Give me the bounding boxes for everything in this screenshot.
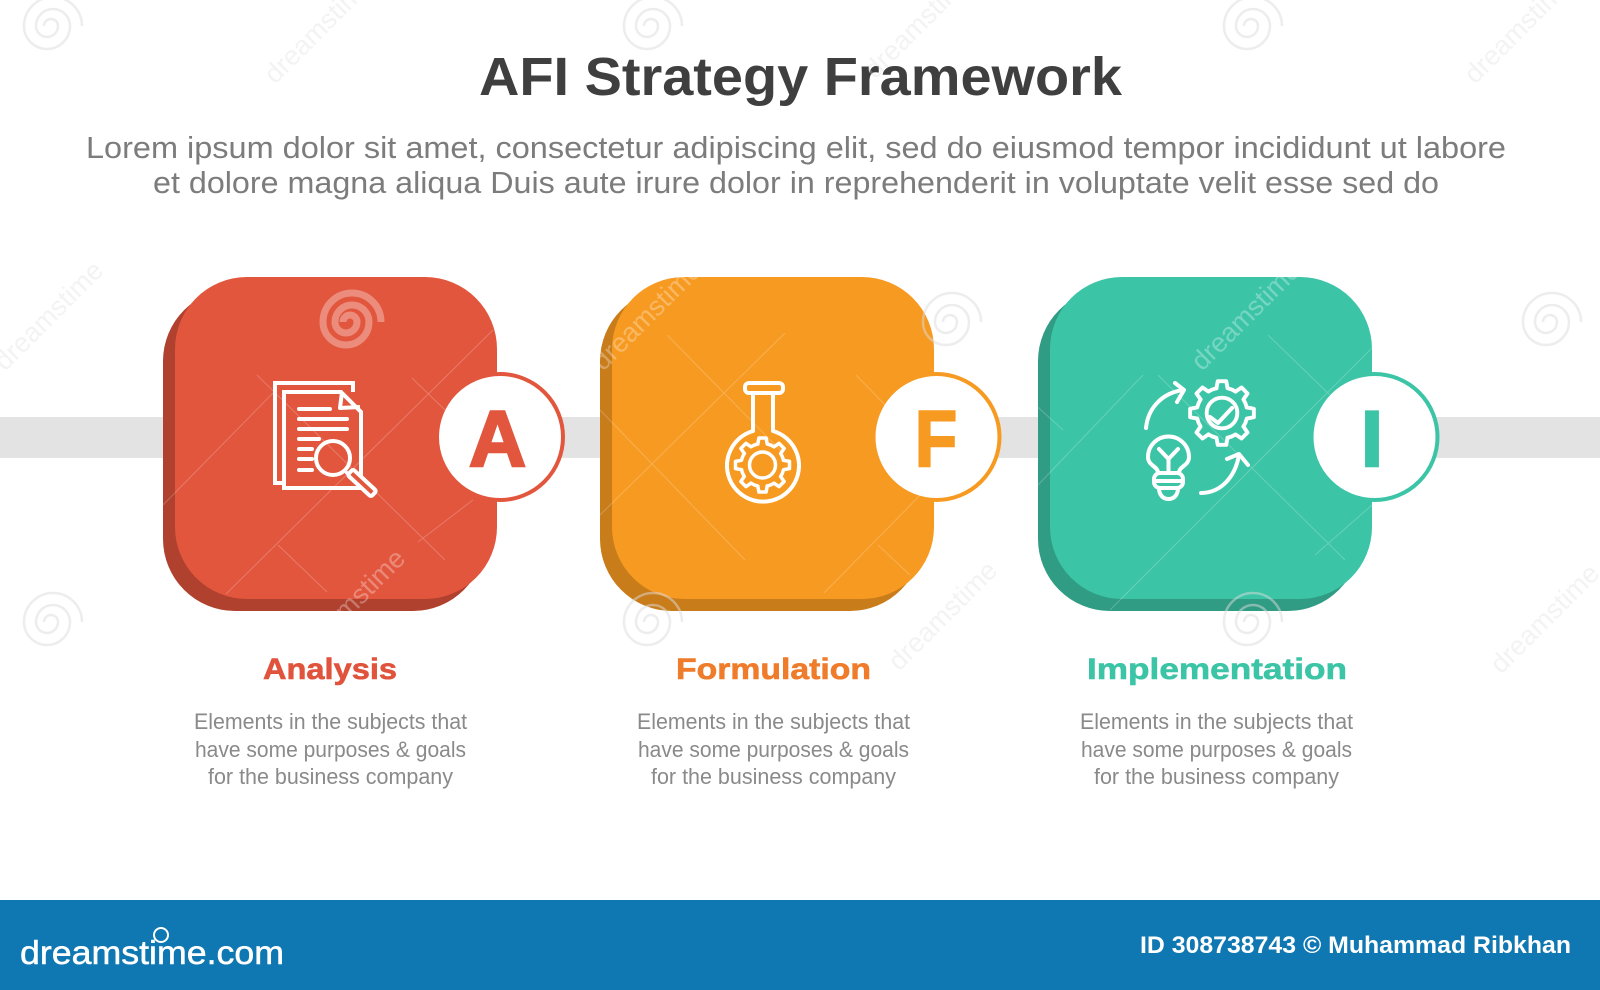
- icon: document with magnifier: [275, 383, 376, 497]
- text block: Analysis: have some purposes & goals: [195, 737, 466, 762]
- watermark: dreamstime text: dreamstime: [586, 255, 707, 376]
- footer credit: ID 308738743 © Muhammad Ribkhan: [1140, 932, 1571, 959]
- subtitle text: Lorem ipsum dolor sit amet, consectetur adipiscing elit, sed do eiusmod tempor incididunt ut labore: [86, 130, 1506, 165]
- text block: Implementation: Elements in the subjects that: [1080, 709, 1353, 734]
- watermark: diagonal lines on cards: [163, 330, 1372, 610]
- subtitle text: et dolore magna aliqua Duis aute irure dolor in reprehenderit in voluptate velit esse sed do: [153, 165, 1439, 200]
- text block: Implementation: for the business company: [1094, 764, 1339, 789]
- watermark: spirals: [24, 0, 1581, 645]
- panel: Analysis card: [163, 277, 563, 611]
- text block: Analysis: Analysis: [263, 653, 397, 686]
- icon: bulb, gear and cycle arrows: [1146, 381, 1254, 499]
- subtitle text: [86, 130, 1506, 200]
- text block: Formulation: Elements in the subjects that: [637, 709, 910, 734]
- badge: letter I: I: [1361, 394, 1383, 483]
- card shadow: Implementation: [1038, 289, 1360, 611]
- badge: letter A: A: [469, 394, 526, 483]
- card face: Analysis: [175, 277, 497, 599]
- watermark: dreamstime text: [0, 0, 1600, 679]
- icon: flask with gear: [727, 383, 799, 502]
- card face: Implementation: [1050, 277, 1372, 599]
- text block: Formulation: [637, 653, 910, 789]
- title: AFI Strategy Framework: [479, 47, 1123, 107]
- footer bar: [0, 900, 1600, 990]
- panel: Implementation card: [1038, 277, 1438, 611]
- badge: letter F: F: [915, 394, 957, 483]
- text block: Implementation: [1080, 653, 1353, 789]
- badge: letter A: [437, 374, 563, 500]
- text block: Formulation: Formulation: [676, 653, 871, 686]
- text block: Analysis: [194, 653, 467, 789]
- card face: Formulation: [612, 277, 934, 599]
- text block: Formulation: for the business company: [651, 764, 896, 789]
- badge: letter F: [874, 374, 1000, 500]
- card shadow: Analysis: [163, 289, 485, 611]
- footer logo: dreamstime.com: dreamstime.com: [20, 934, 284, 971]
- text block: Implementation: Implementation: [1087, 653, 1347, 686]
- text block: Implementation: have some purposes & goals: [1081, 737, 1352, 762]
- text block: Analysis: Elements in the subjects that: [194, 709, 467, 734]
- badge: letter I: [1312, 374, 1438, 500]
- card shadow: Formulation: [600, 289, 922, 611]
- watermark: dreamstime text: dreamstime: [290, 543, 411, 664]
- panel: Formulation card: [600, 277, 1000, 611]
- text block: Analysis: for the business company: [208, 764, 453, 789]
- horizontal connector band: [0, 417, 1600, 458]
- watermark: dreamstime text: dreamstime: [882, 555, 1003, 676]
- text block: Formulation: have some purposes & goals: [638, 737, 909, 762]
- watermark: dreamstime text: dreamstime: [1185, 255, 1306, 376]
